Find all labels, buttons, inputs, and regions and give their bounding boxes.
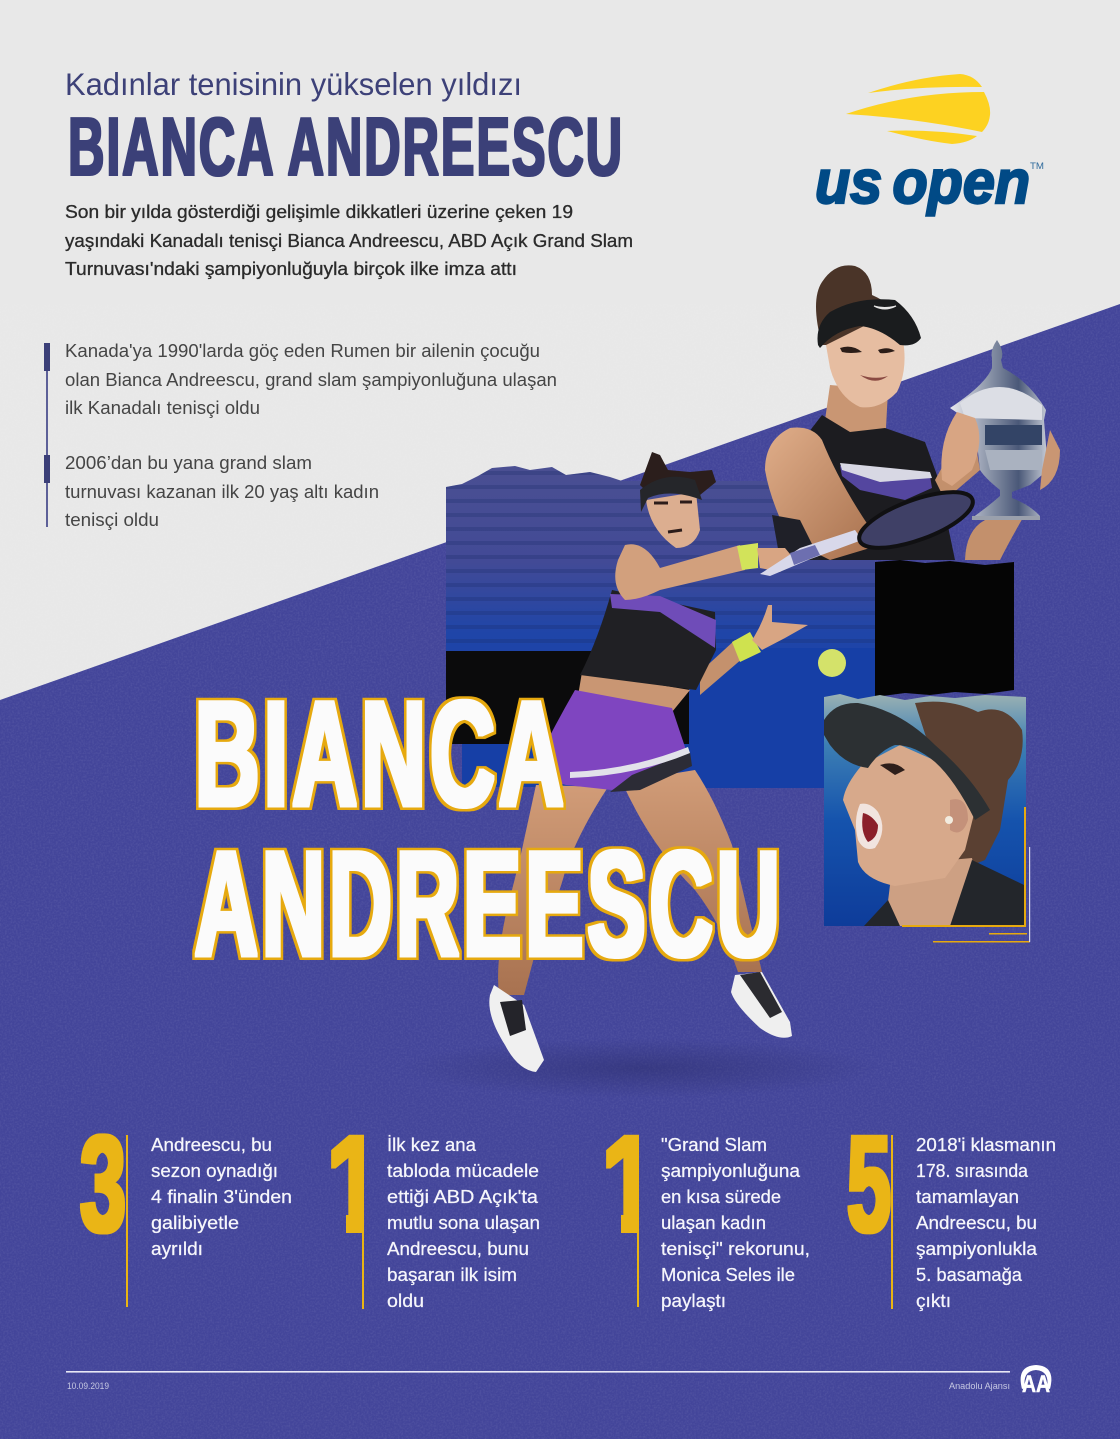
stat: 3 finals: 4 finalin 3'ünden [151,1186,292,1207]
fact: first under 20 [65,452,379,530]
shirt lower left [772,515,820,560]
racket [760,481,979,576]
photo: action shot of Andreescu [489,452,979,1072]
front leg [622,770,762,972]
hair [915,702,1023,870]
fact: first under 20: turnuvası kazanan ilk 20 yaş altı kadın [65,481,379,502]
stat: 5 world ranking: şampiyonlukla [916,1238,1038,1259]
face [826,323,905,407]
tennis ball [818,649,846,677]
shoe right [731,972,792,1038]
stat: 3 finals [80,1108,292,1307]
torso shirt [790,415,955,560]
stat: 1 shortest time record: en kısa sürede [661,1186,781,1207]
icon: Anadolu Agency logo [1021,1365,1051,1398]
hands [941,412,979,486]
stat: 1 first main draw: Andreescu, bunu [387,1238,529,1259]
forearm to trophy [935,435,980,500]
stat: 1 shortest time record: paylaştı [661,1290,726,1311]
stat: 5 world ranking: tamamlayan [916,1186,1019,1207]
icon: Anadolu Agency logo: AA [1022,1371,1050,1398]
eyes and mouth [840,347,895,381]
portrait gold frame [902,807,1030,942]
stat: 5 world ranking: 2018'i klasmanın [916,1134,1056,1155]
fact: first Canadian [65,340,557,418]
photo: Andreescu holding trophy [765,265,1060,560]
icon: flaming ball [846,74,990,144]
shirt [580,590,716,690]
eye and brow [880,763,905,775]
stat: 1 shortest time record: şampiyonluğuna [661,1160,801,1181]
intro paragraph: Son bir yılda gösterdiği gelişimle dikkatleri üzerine çeken 19 [65,202,573,222]
stat: 1 first main draw: mutlu sona ulaşan [387,1212,540,1233]
collage: striped stadium backdrop [446,466,875,788]
neck [825,385,888,437]
fact: first under 20: 2006’dan bu yana grand slam [65,452,312,473]
open mouth [856,804,882,849]
stat: 1 shortest time record: 1 [601,1108,659,1261]
stat: 3 finals: 3 [80,1108,126,1261]
wristband [737,543,758,570]
left arm [765,428,880,560]
large name: Bianca Andreescu [194,670,784,988]
fact: first Canadian: ilk Kanadalı tenisçi oldu [65,397,260,418]
court shadow [400,1038,880,1098]
stat: 1 shortest time record: tenisçi" rekorunu, [661,1238,810,1259]
photo: close-up portrait [824,693,1026,926]
rear leg [498,785,608,995]
visor [824,703,990,820]
stat: 5 world ranking: 5 [847,1108,891,1261]
timeline rule [44,343,50,527]
ear and pearl earring [950,799,968,832]
stat: 5 world ranking [847,1108,1056,1311]
fact: first Canadian: Kanada'ya 1990'larda göç eden Rumen bir ailenin çocuğu [65,340,540,361]
stat: 1 first main draw: 1 [326,1108,384,1261]
neck [888,858,972,926]
stat: 1 first main draw: başaran ilk isim [387,1264,517,1285]
stat: 1 first main draw: İlk kez ana [387,1134,477,1155]
stat: 1 shortest time record: ulaşan kadın [661,1212,766,1233]
stat: 1 shortest time record [606,1134,808,1312]
subtitle: Kadınlar tenisinin yükselen yıldızı [65,66,522,102]
hair [640,452,716,495]
hair [816,265,905,345]
stat: 5 world ranking: çıktı [916,1290,951,1311]
black panel left [446,651,689,744]
visor [818,299,921,348]
stat: 1 shortest time record: "Grand Slam [661,1134,767,1155]
midriff [578,672,690,712]
extended arm [615,544,745,600]
stat: 5 world ranking: 5. basamağa [916,1264,1023,1285]
fact: first under 20: tenisçi oldu [65,509,159,530]
date: 10.09.2019 [67,1381,109,1392]
hand [757,548,795,572]
logo: US Open [815,74,1044,216]
stat: 5 world ranking: Andreescu, bu [916,1212,1037,1233]
stat: 3 finals: ayrıldı [151,1238,203,1259]
skirt [530,690,690,790]
intro paragraph: Turnuvası'ndaki şampiyonluğuyla birçok ilke imza attı [65,259,517,279]
facts list [44,340,557,530]
title block [65,66,624,193]
stat: 1 first main draw: ettiği ABD Açık'ta [387,1186,539,1207]
face [843,745,975,886]
background: blue diagonal panel [0,304,1120,1439]
far arm with wristband [700,640,750,695]
trophy [950,340,1048,520]
wordmark: us open [815,148,1030,216]
source: Anadolu Ajansı [949,1381,1010,1392]
black panel right [875,560,1014,697]
main heading: BIANCA ANDREESCU [68,100,624,193]
stat: 3 finals: galibiyetle [151,1212,239,1233]
shoe left [489,985,544,1072]
stat: 5 world ranking: 178. sırasında [916,1160,1029,1181]
large name: Bianca Andreescu: BIANCA [194,670,568,838]
stat: 1 first main draw: tabloda mücadele [387,1160,539,1181]
shirt [864,860,1026,926]
face [646,492,700,548]
eyes and mouth [654,502,692,532]
stat: 1 first main draw [331,1134,539,1309]
stat: 1 first main draw: oldu [387,1290,424,1311]
stat: 1 shortest time record: Monica Seles ile [661,1264,795,1285]
fact: first Canadian: olan Bianca Andreescu, grand slam şampiyonluğuna ulaşan [65,369,557,390]
visor [640,477,702,512]
logo: US Open: TM [1030,161,1044,171]
intro paragraph [65,202,633,279]
stat: 3 finals: Andreescu, bu [151,1134,272,1155]
footer [66,1365,1051,1398]
stat: 3 finals: sezon oynadığı [151,1160,278,1181]
intro paragraph: yaşındaki Kanadalı tenisçi Bianca Andreescu, ABD Açık Grand Slam [65,231,633,251]
